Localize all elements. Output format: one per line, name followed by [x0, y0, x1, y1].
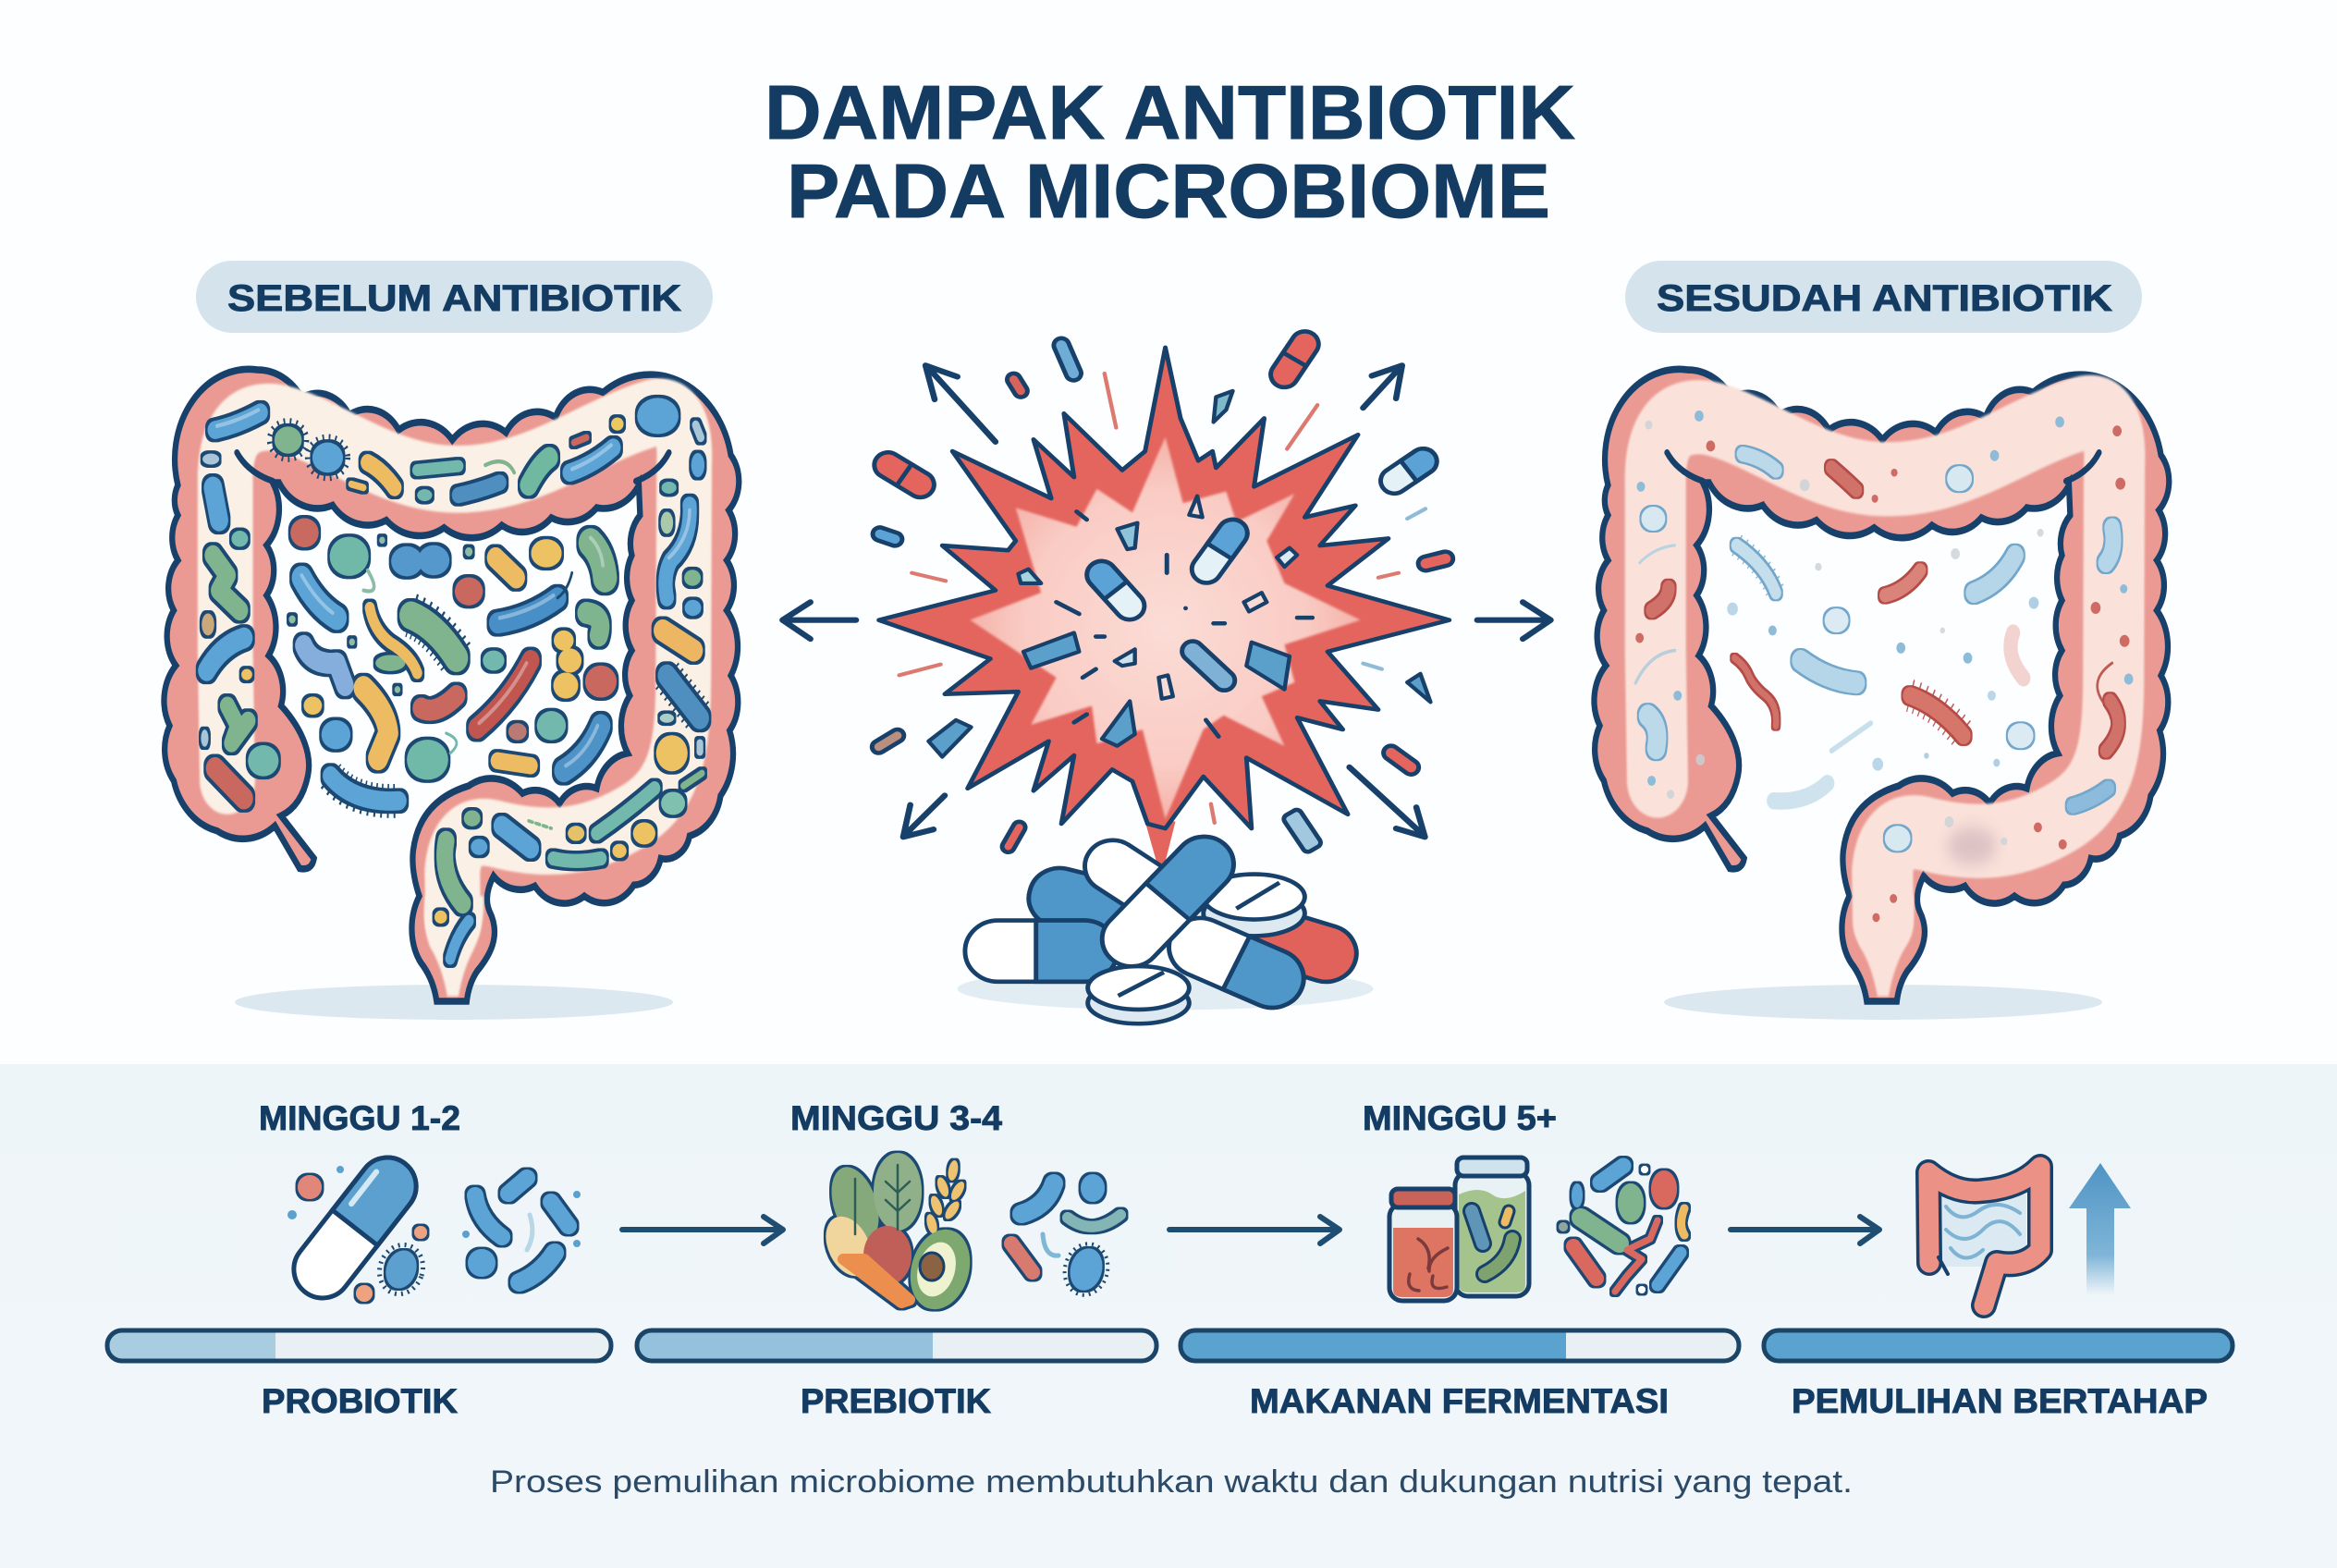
heading pill: before antibiotics: SEBELUM ANTIBIOTIK [227, 278, 681, 319]
small grey dots [1645, 421, 2044, 845]
arrow 1 [622, 1217, 783, 1243]
red jar [1389, 1189, 1457, 1301]
depleted colon illustration [1594, 369, 2169, 1001]
panel: recovery timeline [0, 1064, 2337, 1568]
stage labels: PROBIOTIK [262, 1382, 458, 1420]
icon: prebiotic vegetables and bacteria [817, 1153, 1120, 1317]
small red dots [1635, 425, 2130, 922]
flying capsules and shards [869, 326, 1455, 854]
icon: upward recovery arrow [2069, 1163, 2131, 1294]
pale blue bacteria [1641, 454, 2113, 851]
week labels: MINGGU 3-4 [790, 1099, 1002, 1137]
green jar [1455, 1158, 1529, 1296]
fermented bacteria cluster [1559, 1166, 1684, 1293]
explosion with antibiotic capsules [782, 326, 1550, 1023]
week labels: MINGGU 1-2 [259, 1099, 460, 1137]
week labels: MINGGU 5+ [1363, 1099, 1557, 1137]
stage labels: PREBIOTIK [801, 1382, 991, 1420]
stage labels: MAKANAN FERMENTASI [1250, 1382, 1669, 1420]
free bacteria in the center of the colon [288, 519, 617, 801]
title: PADA MICROBIOME [787, 148, 1550, 234]
title [765, 69, 1575, 234]
arrow 2 [1169, 1217, 1340, 1243]
starburst [879, 348, 1450, 828]
arrows radiating outward [782, 365, 1550, 837]
pile of antibiotic pills [958, 826, 1373, 1023]
icon: probiotic capsule with bacteria [282, 1146, 581, 1309]
caption: Proses pemulihan microbiome membutuhkan waktu dan dukungan nutrisi yang tepat. [490, 1464, 1853, 1500]
thin red details [2011, 633, 2112, 704]
healthy colon illustration [164, 369, 739, 1001]
burst tail [1145, 821, 1176, 866]
spikes on pale and red bacteria [1737, 545, 1964, 736]
sparse surviving bacteria [1635, 410, 2134, 922]
bacterial flagella [363, 461, 572, 828]
progress bar 1: probiotic [107, 1330, 611, 1361]
small blue dots [1637, 410, 2134, 786]
stage labels: PEMULIHAN BERTAHAP [1792, 1382, 2208, 1420]
starburst inner glow [970, 437, 1361, 819]
ground shadow right [1664, 985, 2102, 1020]
title: DAMPAK ANTIBIOTIK [765, 69, 1575, 155]
progress bar 4: gradual recovery [1764, 1330, 2233, 1361]
red harmful bacteria [1652, 468, 2119, 751]
stage labels [262, 1382, 2208, 1420]
bacteria inside the colon wall [201, 398, 704, 959]
capsule fragments inside burst [1019, 496, 1313, 746]
heading pill: before antibiotics [196, 261, 713, 333]
ground shadow left [235, 985, 673, 1020]
bruise mark [1947, 827, 1997, 865]
icon: small recovered colon [1928, 1167, 2040, 1305]
week labels [259, 1099, 1557, 1137]
heading pill: after antibiotics [1625, 261, 2142, 333]
bacteria highlights [217, 410, 690, 766]
progress bar 2: prebiotic [637, 1330, 1156, 1361]
heading pill: after antibiotics: SESUDAH ANTIBIOTIK [1657, 278, 2112, 319]
arrow 3 [1731, 1217, 1879, 1243]
progress bar 3: fermented food [1180, 1330, 1739, 1361]
faded bacteria ghosts [1635, 545, 1871, 802]
spikes on bacteria [270, 422, 700, 801]
icon: fermented food jars and bacteria [1389, 1158, 1684, 1301]
